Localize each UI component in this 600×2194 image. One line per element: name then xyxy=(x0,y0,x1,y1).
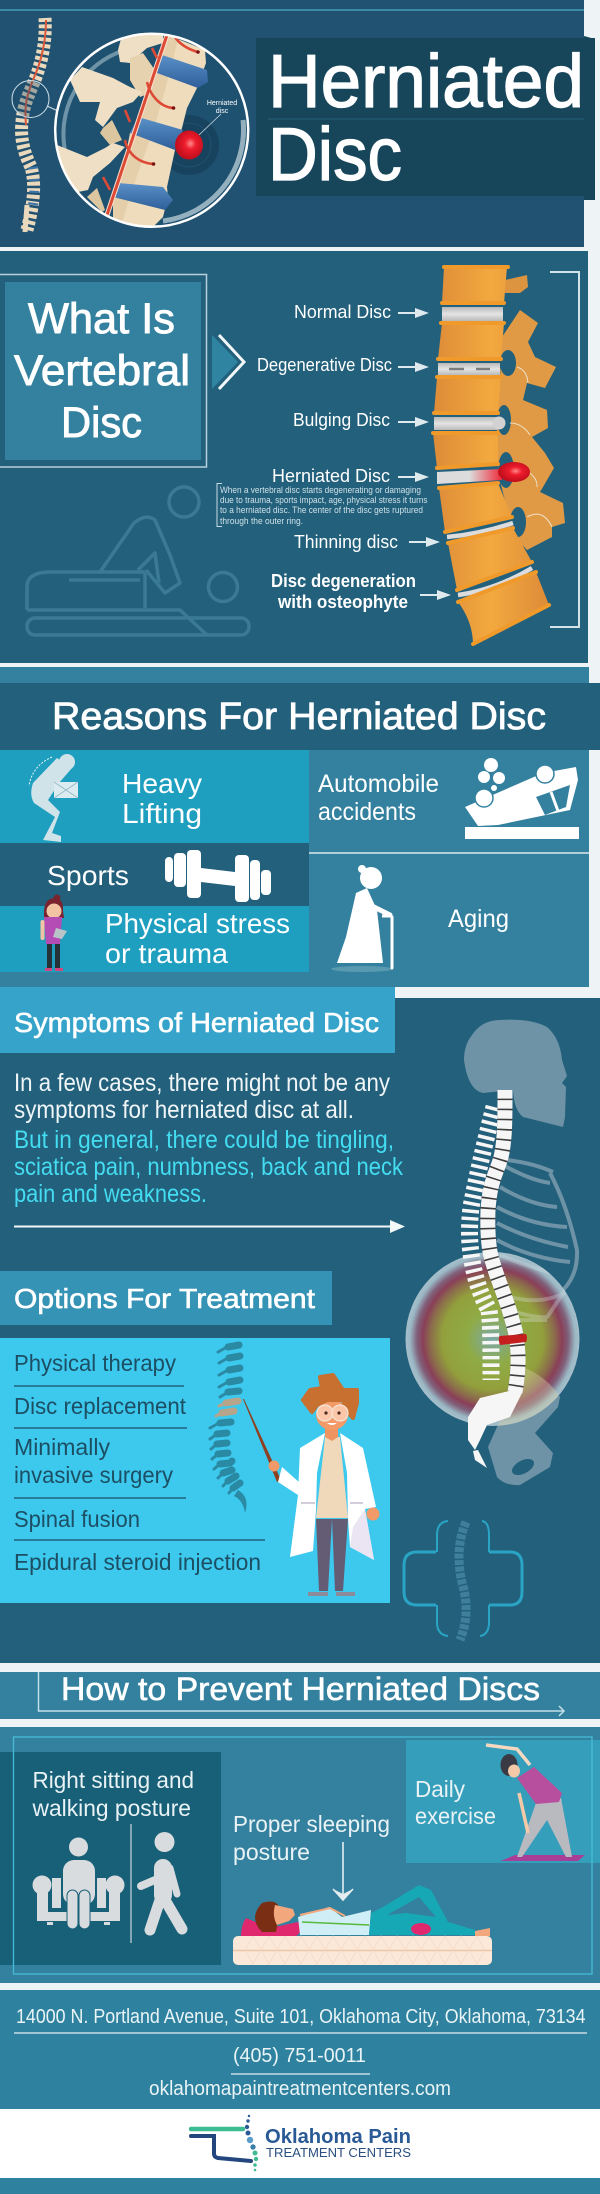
panel: contact footer xyxy=(0,1990,600,2109)
card: heavy lifting xyxy=(0,750,309,843)
heading: Reasons For Herniated Disc xyxy=(52,696,546,738)
label: thinning disc: Thinning disc xyxy=(294,532,398,552)
heading box: Disc xyxy=(61,399,142,447)
text: symptoms description: But in general, there could be tingling, xyxy=(14,1126,394,1154)
card: automobile accidents xyxy=(318,758,579,839)
website: oklahomapaintreatmentcenters.com xyxy=(149,2078,451,2100)
title panel: Disc xyxy=(268,112,402,196)
footer band xyxy=(0,2178,600,2194)
card: daily exercise: exercise xyxy=(415,1803,496,1829)
panel: logo: TREATMENT CENTERS xyxy=(266,2145,411,2160)
icon: massage watermark xyxy=(27,487,249,635)
frame xyxy=(14,1737,592,1974)
spine xyxy=(470,1090,518,1392)
labels with arrows xyxy=(257,302,416,612)
label: disc degeneration with osteophyte: with osteophyte xyxy=(277,592,408,612)
label: herniated disc: Herniated Disc xyxy=(272,466,390,486)
arrow xyxy=(38,1672,564,1716)
label: normal disc: Normal Disc xyxy=(294,302,391,322)
mattress and sleeper xyxy=(233,1885,492,1965)
card: heavy lifting: Lifting xyxy=(122,798,202,829)
doctor illustration xyxy=(243,1375,380,1596)
text: herniated disc description: When a vertebral disc starts degenerating or damaging xyxy=(220,485,421,496)
label: herniated disc: Herniated xyxy=(207,100,237,107)
card: sitting and walking xyxy=(0,1752,221,1965)
card: proper sleeping posture: posture xyxy=(233,1839,310,1865)
text: herniated disc description xyxy=(217,484,428,527)
card: heavy lifting: Heavy xyxy=(122,768,202,799)
card: automobile accidents: accidents xyxy=(318,798,416,826)
icon: injured girl xyxy=(40,894,67,971)
label: disc degeneration with osteophyte: Disc degeneration xyxy=(271,571,416,591)
panel: header xyxy=(0,0,595,247)
text: symptoms description: pain and weakness. xyxy=(14,1180,207,1208)
card: daily exercise xyxy=(406,1740,600,1863)
skeleton illustration xyxy=(406,1020,580,1485)
icon: walking person xyxy=(141,1832,182,1930)
label: disc degeneration with osteophyte xyxy=(271,571,416,612)
icon: dumbbell xyxy=(165,850,271,902)
label: bulging disc: Bulging Disc xyxy=(293,410,390,430)
heading: options for treatment xyxy=(0,1271,332,1325)
text: symptoms description: sciatica pain, numbness, back and neck xyxy=(14,1153,403,1181)
label: degenerative disc: Degenerative Disc xyxy=(257,355,392,375)
title panel xyxy=(256,36,595,200)
icon: full spine xyxy=(12,18,58,232)
treatment options: Minimally xyxy=(14,1434,110,1460)
text: herniated disc description: through the outer ring. xyxy=(220,516,303,527)
card: proper sleeping posture xyxy=(233,1811,492,1965)
icon: elderly woman with cane xyxy=(331,865,393,972)
treatment options: Physical therapy xyxy=(14,1350,176,1376)
text: herniated disc description: due to trauma, sports impact, age, physical stress it turns xyxy=(220,495,428,506)
heading box xyxy=(0,274,206,467)
treatment options: Epidural steroid injection xyxy=(14,1549,261,1575)
treatment options xyxy=(14,1350,261,1575)
card: physical stress or trauma: or trauma xyxy=(105,938,228,969)
exercise woman xyxy=(486,1745,585,1861)
heading: options for treatment: Options For Treatment xyxy=(14,1283,315,1314)
arrow: down to bed xyxy=(333,1842,353,1900)
panel: how to prevent heading: How to Prevent Herniated Discs xyxy=(61,1671,540,1707)
panel: what is vertebral disc xyxy=(0,251,588,663)
ribs xyxy=(497,1160,577,1290)
card: physical stress or trauma: Physical stress xyxy=(105,908,290,939)
treatment options: Disc replacement xyxy=(14,1393,187,1419)
panel: reasons for herniated disc xyxy=(0,667,600,987)
card: sitting and walking: Right sitting and xyxy=(32,1767,194,1793)
icon: seated person xyxy=(32,1838,124,1929)
icon: oklahoma spine logo xyxy=(191,2115,258,2171)
treatment options: invasive surgery xyxy=(14,1462,173,1488)
card: sports: Sports xyxy=(47,860,129,891)
text: symptoms description: symptoms for herniated disc at all. xyxy=(14,1096,354,1124)
logo text: Oklahoma Pain xyxy=(265,2126,411,2148)
card: physical stress or trauma xyxy=(0,894,309,972)
card: aging xyxy=(331,865,509,972)
text: herniated disc description: to a herniated disc. The center of the disc gets ruptured xyxy=(220,505,423,516)
pain glow xyxy=(406,1252,580,1426)
card: aging: Aging xyxy=(448,905,509,933)
arrow: symptoms to skeleton xyxy=(14,1220,405,1233)
card: proper sleeping posture: Proper sleeping xyxy=(233,1811,390,1837)
arrows xyxy=(398,308,451,600)
panel: logo xyxy=(0,2109,600,2178)
icon: magnified spine with herniated disc: disc xyxy=(216,108,229,115)
spine stages illustration xyxy=(433,267,565,645)
card: sitting and walking: walking posture xyxy=(32,1795,191,1821)
treatment options: Spinal fusion xyxy=(14,1506,140,1532)
pelvis xyxy=(488,1368,560,1485)
icon: skull xyxy=(464,1020,567,1127)
card: daily exercise: Daily xyxy=(415,1776,465,1802)
heading: symptoms: Symptoms of Herniated Disc xyxy=(14,1007,379,1038)
phone: (405) 751-0011 xyxy=(233,2045,366,2067)
icon: magnified spine with herniated disc xyxy=(55,33,249,230)
card: automobile accidents: Automobile xyxy=(318,770,439,798)
panel: how to prevent heading xyxy=(0,1671,600,1719)
panel: prevention xyxy=(0,1727,600,1983)
heading box: Vertebral xyxy=(14,347,190,395)
icon: overturned car xyxy=(465,758,579,839)
title text: Herniated xyxy=(268,39,584,123)
icon: teaching spine xyxy=(210,1345,246,1513)
panel: symptoms and treatment background xyxy=(0,987,600,1663)
panel: treatment list xyxy=(0,1338,390,1603)
icon: person lifting xyxy=(29,754,78,842)
text: symptoms description: In a few cases, there might not be any xyxy=(14,1069,390,1097)
text: symptoms description xyxy=(14,1069,403,1208)
icon: medical cross with spine xyxy=(404,1521,522,1640)
heading: symptoms xyxy=(0,987,395,1053)
arrow: chevron xyxy=(212,335,244,389)
card: sports xyxy=(0,843,309,906)
heading box: What Is xyxy=(28,295,175,343)
